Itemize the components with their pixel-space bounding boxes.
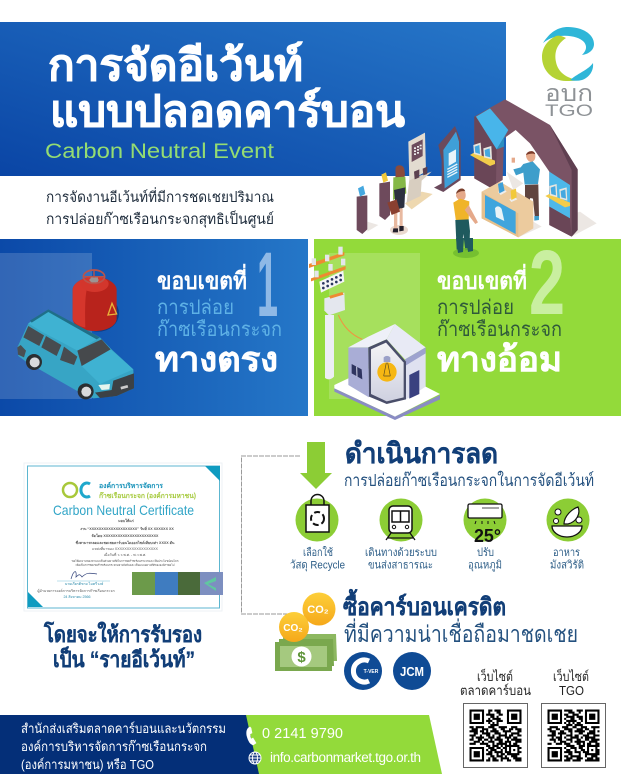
certificate title: Carbon Neutral Certificate bbox=[53, 502, 194, 518]
illustration: electric pole and house bbox=[309, 247, 440, 420]
certificate body: จัดโดย XXXXXXXXXXXXXXXXXXXXXXX bbox=[92, 533, 159, 538]
icon: vegetarian food bbox=[546, 498, 590, 542]
dashed connector line bbox=[242, 456, 300, 614]
footer organisation text: องค์การบริหารจัดการก๊าซเรือนกระจก bbox=[21, 739, 207, 754]
icon: money and coins: CO₂ bbox=[283, 623, 303, 634]
scope 2 type: ทางอ้อม bbox=[437, 341, 562, 379]
icon: money and coins: $ bbox=[297, 649, 306, 666]
certificate body: ซึ่งสามารถลดและชดเชยคาร์บอนไดออกไซด์เทียบเท่า XXXX ตัน bbox=[75, 540, 175, 545]
certificate body: มอบให้แก่ bbox=[118, 518, 134, 523]
illustration: man's legs and shadow on scope 2 bbox=[453, 238, 479, 258]
scope 2 description bbox=[437, 297, 562, 341]
logo: TGO: TGO bbox=[545, 101, 593, 120]
icon: train bbox=[380, 498, 422, 542]
illustration: car and gas tank bbox=[17, 270, 134, 399]
icon: money and coins: CO₂ bbox=[307, 604, 329, 616]
arrow: down bbox=[300, 442, 332, 489]
scope 2 number: 2 bbox=[529, 232, 565, 334]
counter bbox=[482, 182, 533, 237]
logo: TGO bbox=[542, 27, 594, 120]
icon labels bbox=[290, 546, 584, 572]
scope 1 type: ทางตรง bbox=[155, 341, 278, 379]
panel: scope 1 bbox=[0, 234, 308, 416]
title: การจัดอีเว้นท์ bbox=[48, 41, 303, 90]
QR label: carbon market: ตลาดคาร์บอน bbox=[460, 683, 531, 698]
scope 1 label: ขอบเขตที่ bbox=[157, 263, 247, 295]
certificate body: ขอให้ผลงานของท่านจงเป็นตัวอย่างที่ดีในการลดก๊าซเรือนกระจกและเป็นประโยชน์ต่อโลก bbox=[72, 558, 179, 563]
panel: scope 2 bbox=[314, 232, 621, 416]
icon: recycle bag bbox=[296, 495, 338, 542]
footer: blue organisation band bbox=[0, 715, 259, 774]
certificate logos: องค์การบริหารจัดการ bbox=[99, 481, 163, 490]
panel: certificate bbox=[24, 463, 223, 611]
icon labels: วัสดุ Recycle bbox=[290, 560, 345, 572]
illustration: exhibition booth bbox=[357, 99, 597, 251]
QR label: carbon market: เว็บไซต์ bbox=[477, 667, 513, 684]
text block: definition: การปล่อยก๊าซเรือนกระจกสุทธิเป็นศูนย์ bbox=[46, 209, 274, 228]
subheading: buy carbon credits: ที่มีความน่าเชื่อถือมาชดเชย bbox=[344, 618, 578, 647]
certificate body: ผู้อำนวยการองค์การบริหารจัดการก๊าซเรือนกระจก bbox=[37, 588, 115, 593]
certificate body: นายเกียรติชาย ไมตรีวงษ์ bbox=[65, 581, 104, 586]
scope 1 description: การปล่อย bbox=[157, 297, 234, 319]
icon labels: เลือกใช้ bbox=[303, 546, 333, 559]
phone number: 0 2141 9790 bbox=[262, 726, 343, 742]
text block: definition: การจัดงานอีเว้นท์ที่มีการชดเชยปริมาณ bbox=[46, 187, 274, 206]
icon labels: มังสวิรัติ bbox=[550, 560, 584, 572]
logo: T-VER: T-VER bbox=[364, 669, 379, 675]
pole bbox=[309, 247, 362, 379]
kiosk 1 bbox=[405, 192, 433, 209]
QR label: TGO: TGO bbox=[559, 683, 584, 698]
text block: certificate caption bbox=[43, 621, 202, 672]
scope 1 description: ก๊าซเรือนกระจก bbox=[157, 319, 282, 341]
QR code: carbon market bbox=[464, 704, 528, 768]
panel: header banner bbox=[0, 22, 506, 176]
heading: reduce: ดำเนินการลด bbox=[345, 438, 498, 469]
scope 2 label: ขอบเขตที่ bbox=[437, 263, 527, 295]
QR label: carbon market bbox=[460, 667, 531, 698]
subtitle: Carbon Neutral Event: Carbon Neutral Event bbox=[45, 140, 274, 163]
footer organisation text: (องค์การมหาชน) หรือ TGO bbox=[21, 757, 154, 772]
title bbox=[48, 41, 406, 136]
certificate photos bbox=[132, 572, 223, 595]
text block: certificate caption: โดยจะให้การรับรอง bbox=[43, 621, 202, 647]
icon labels: เดินทางด้วยระบบ bbox=[365, 547, 437, 559]
title: แบบปลอดคาร์บอน bbox=[50, 87, 406, 136]
logo: T-VER bbox=[344, 652, 382, 690]
icon: air conditioner 25 degrees bbox=[464, 498, 506, 546]
heading: buy carbon credits: ซื้อคาร์บอนเครดิต bbox=[343, 588, 506, 621]
icon: air conditioner 25 degrees: 25° bbox=[474, 526, 501, 546]
man in yellow bbox=[453, 189, 478, 251]
logo: JCM bbox=[393, 652, 431, 690]
QR label: TGO bbox=[553, 667, 589, 698]
certificate body bbox=[37, 518, 179, 599]
QR code: TGO bbox=[542, 704, 606, 768]
logo: JCM: JCM bbox=[400, 664, 424, 679]
icon labels: อาหาร bbox=[553, 547, 580, 559]
arch bbox=[474, 99, 578, 237]
icon: globe bbox=[249, 752, 261, 764]
icon labels: ขนส่งสาธารณะ bbox=[368, 560, 433, 572]
scope 1 description bbox=[157, 297, 282, 341]
woman visitor bbox=[387, 165, 406, 232]
footer organisation text bbox=[21, 721, 226, 772]
pedestals bbox=[357, 195, 367, 234]
icon: phone bbox=[247, 727, 256, 745]
text block: certificate caption: เป็น “รายอีเว้นท์” bbox=[53, 645, 195, 672]
QR label: TGO: เว็บไซต์ bbox=[553, 667, 589, 684]
certificate body: แหล่งที่มาของ XXXXXXXXXXXXXXXXXX bbox=[92, 546, 159, 551]
man in blue bbox=[512, 151, 540, 221]
car bbox=[17, 309, 134, 399]
certificate body: 24 สิงหาคม 2566 bbox=[63, 595, 91, 599]
certificate logos: ก๊าซเรือนกระจก (องค์การมหาชน) bbox=[99, 491, 196, 500]
certificate body: เมื่อวันที่ ว.ว.พ.ศ. - พ.ว.พ.ศ. bbox=[104, 552, 146, 557]
scope 2 description: การปล่อย bbox=[437, 297, 514, 319]
footer organisation text: สำนักส่งเสริมตลาดคาร์บอนและนวัตกรรม bbox=[21, 721, 226, 736]
gas tank bbox=[73, 270, 119, 332]
logo: TGO: อบก bbox=[545, 80, 593, 106]
text block: definition bbox=[46, 187, 274, 228]
footer: green contact band bbox=[240, 715, 442, 774]
panel: scope 1: 1 bbox=[257, 234, 278, 336]
icon labels: ปรับ bbox=[477, 547, 494, 559]
certificate body: เพื่อเป็นการชดเชยก๊าซเรือนกระจกอย่างยั่งยืนและเป็นแบบอย่างที่ดีขององค์กรต่อไป bbox=[76, 562, 175, 567]
kiosk 2 bbox=[434, 126, 461, 192]
certificate signature bbox=[57, 572, 110, 581]
house bbox=[334, 324, 440, 420]
icon labels: อุณหภูมิ bbox=[468, 560, 502, 572]
certificate logos bbox=[63, 481, 196, 500]
email address: info.carbonmarket.tgo.or.th bbox=[270, 750, 421, 765]
shelves bbox=[470, 153, 495, 166]
scope 2 description: ก๊าซเรือนกระจก bbox=[437, 319, 562, 341]
icon: money and coins bbox=[275, 592, 337, 671]
certificate body: งาน “XXXXXXXXXXXXXXXXXXXX” วันที่ XX XXXXXX XX bbox=[80, 526, 174, 531]
